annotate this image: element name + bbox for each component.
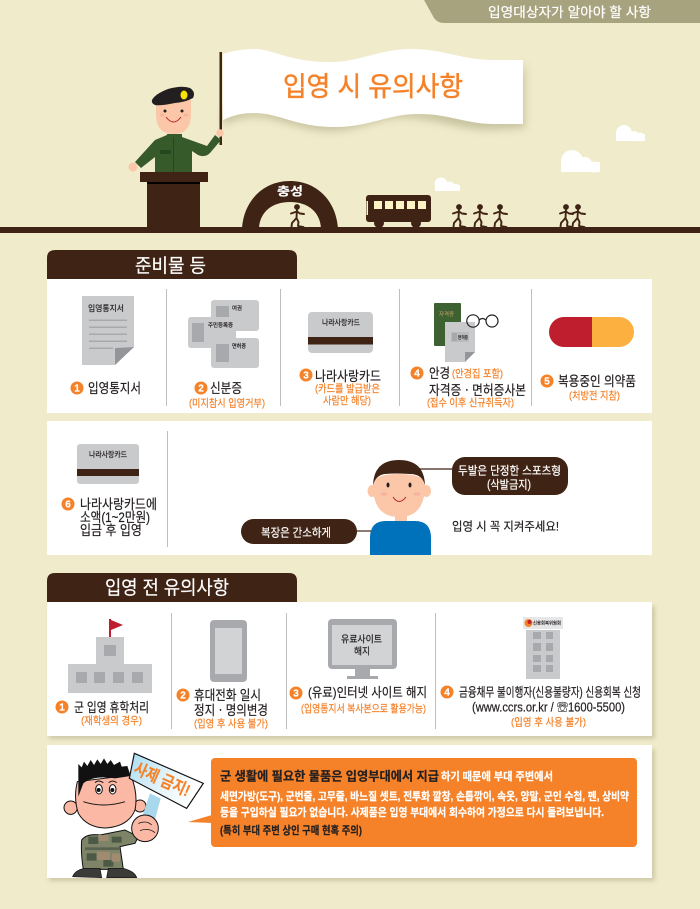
callout: orange note: (특히 부대 주변 상인 구매 현혹 주의) <box>220 823 362 837</box>
item 4 label: (안경집 포함) <box>452 367 503 380</box>
icon: license book, copy and glasses: 면허증 <box>458 334 468 341</box>
sign text: 사제 금지! <box>131 759 193 800</box>
item 4 label: 자격증ㆍ면허증사본 <box>429 383 526 398</box>
callout: hair: (삭발금지) <box>487 478 531 492</box>
item 5 label: 5 <box>544 376 550 388</box>
callout: clothing: 복장은 간소하게 <box>261 526 331 540</box>
item 5 label <box>540 374 636 402</box>
panel: supplies row 1 <box>47 279 652 413</box>
item 4 label: 4 <box>444 688 450 698</box>
heading: 입영 전 유의사항 <box>47 573 297 602</box>
bus <box>366 195 431 228</box>
icon: credit recovery office building <box>523 617 563 679</box>
clouds <box>434 125 645 191</box>
item 3 label: (유료)인터넷 사이트 해지 <box>308 685 427 700</box>
item 5 label: 복용중인 의약품 <box>558 374 636 389</box>
item 6 label: 6 <box>65 500 71 510</box>
item 1 label <box>56 700 149 727</box>
item 1 label <box>70 381 141 396</box>
icon: ID cards <box>188 300 259 368</box>
icon: monitor: 해지 <box>354 646 370 658</box>
icon: enlistment notice document: 입영통지서 <box>88 303 124 313</box>
icon: mobile phone <box>210 620 247 682</box>
icon: ID cards: 면허증 <box>232 342 246 350</box>
icon: card: 나라사랑카드 <box>89 450 127 459</box>
panel: before enlistment <box>47 602 652 736</box>
item 4 label: (접수 이후 신규취득자) <box>427 397 514 409</box>
heading: 준비물 등 <box>47 250 297 279</box>
item 3 label: (입영통지서 복사본으로 활용가능) <box>301 702 426 715</box>
note: 입영 시 꼭 지켜주세요! <box>452 520 559 534</box>
callout: orange note: 세면가방(도구), 군번줄, 고무줄, 바느질 셋트, 전투화 깔창, 손톱깎이, 속옷, 양말, 군인 수첩, 펜, 상비약 <box>220 789 629 803</box>
arch gate 충성 <box>242 181 338 228</box>
icon: credit recovery office building: 신용회복위원회 <box>533 620 561 626</box>
icon: medicine capsule <box>549 317 634 347</box>
item 2 label: (미지참시 입영거부) <box>189 396 265 410</box>
icon: Nara Sarang card <box>308 312 373 353</box>
item 4 label <box>440 684 641 728</box>
item 2 label: 신분증 <box>210 381 242 396</box>
ground line <box>0 227 700 233</box>
item 2 label: 정지ㆍ명의변경 <box>194 703 268 718</box>
soldier at podium <box>128 87 224 228</box>
item 4 label <box>410 366 526 409</box>
panel: prohibited personal items <box>47 745 652 878</box>
panel shadow <box>49 606 655 739</box>
icon: enlistment notice document <box>82 296 134 365</box>
title: 입영 시 유의사항 <box>283 72 463 102</box>
icon: school building with flag <box>68 619 152 693</box>
item 3 label: 3 <box>293 688 299 700</box>
item 4 label: 금융채무 불이행자(신용불량자) 신용회복 신청 <box>459 684 641 700</box>
icon: Nara Sarang card: 나라사랑카드 <box>322 318 360 327</box>
item 2 label <box>189 381 265 410</box>
icon: soldier mascot holding sign <box>64 753 203 878</box>
flag pole <box>220 52 222 145</box>
icon: monitor <box>328 619 397 679</box>
icon: license book, copy and glasses <box>434 303 498 362</box>
callout: orange note: 등을 구입하실 필요가 없습니다. 사제품은 입영 부대에서 회수하여 가정으로 다시 돌려보냅니다. <box>220 805 604 819</box>
item 6 label <box>62 497 157 538</box>
item 5 label: (처방전 지참) <box>569 390 620 402</box>
item 4 label: 4 <box>414 368 420 380</box>
heading: 입영 전 유의사항: 입영 전 유의사항 <box>105 577 229 599</box>
item 3 label: 나라사랑카드 <box>315 369 381 384</box>
callout: orange note <box>188 758 637 847</box>
arch gate 충성: 충성 <box>277 185 303 198</box>
panel: supplies row 2 and appearance <box>47 421 652 555</box>
item 4 label: (입영 후 사용 불가) <box>511 716 586 728</box>
callout: orange note: 군 생활에 필요한 물품은 입영부대에서 지급 <box>220 768 439 784</box>
item 4 label: (www.ccrs.or.kr / ☏1600-5500) <box>472 700 625 714</box>
panel shadow <box>49 749 655 881</box>
item 6 label: 입금 후 입영 <box>80 523 142 538</box>
item 1 label: 1 <box>74 384 80 394</box>
item 2 label: 2 <box>180 690 186 702</box>
item 4 label: 안경 <box>429 366 450 381</box>
podium <box>140 172 208 228</box>
item 2 label: 2 <box>198 384 204 394</box>
top tab: section label <box>424 0 700 23</box>
item 3 label: (카드를 발급받은 <box>315 383 380 395</box>
item 1 label: 1 <box>59 702 65 714</box>
callout: clothing <box>241 519 371 544</box>
top tab: section label: 입영대상자가 알아야 할 사항 <box>488 5 651 20</box>
callout: orange note: 하기 때문에 부대 주변에서 <box>441 769 553 783</box>
marching figures <box>453 204 585 227</box>
icon: card <box>77 444 139 484</box>
item 6 label: 소액(1~2만원) <box>80 510 150 525</box>
item 2 label <box>176 688 268 730</box>
item 1 label: 입영통지서 <box>88 381 141 396</box>
icon: ID cards: 여권 <box>232 304 242 312</box>
icon: ID cards: 주민등록증 <box>208 321 233 329</box>
heading: 준비물 등: 준비물 등 <box>135 255 206 277</box>
item 1 label: (재학생의 경우) <box>81 714 142 727</box>
item 3 label <box>300 368 381 407</box>
icon: monitor: 유료사이트 <box>341 634 382 646</box>
flag banner with title <box>220 49 525 145</box>
callout: hair: 두발은 단정한 스포츠형 <box>458 464 561 478</box>
item 3 label <box>290 685 427 715</box>
item 2 label: (입영 후 사용 불가) <box>194 717 268 730</box>
item 3 label: 사람만 해당) <box>323 394 371 407</box>
icon: license book, copy and glasses: 자격증 <box>439 310 454 318</box>
item 2 label: 휴대전화 일시 <box>194 688 261 703</box>
item 3 label: 3 <box>303 370 309 382</box>
callout: hair <box>419 457 568 495</box>
icon: boy with short hair <box>368 460 431 555</box>
item 1 label: 군 입영 휴학처리 <box>74 700 149 715</box>
item 6 label: 나라사랑카드에 <box>80 497 157 512</box>
